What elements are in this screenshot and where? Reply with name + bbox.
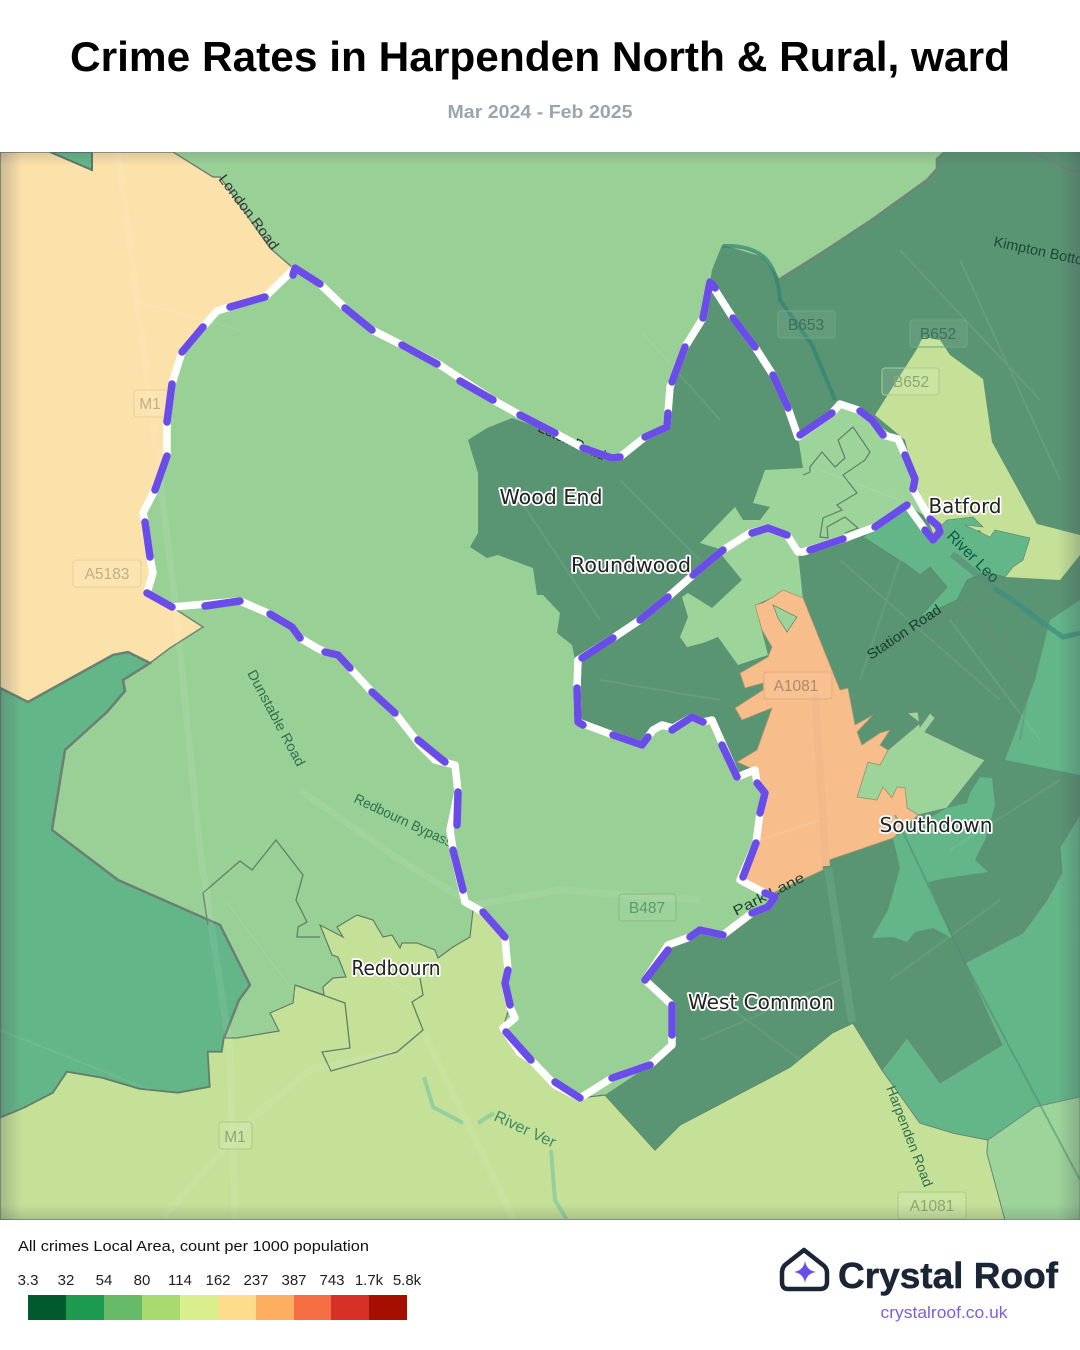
road shield: B652 lower: B652 <box>893 374 929 391</box>
road label: Park Lane: Park Lane <box>730 869 807 919</box>
legend tick labels: 5.8k <box>393 1272 422 1289</box>
road shield: B652 upper <box>910 320 967 347</box>
road shield: B652 upper: B652 <box>920 326 956 343</box>
road shield: M1 south <box>219 1122 252 1149</box>
region: west medium green <box>0 652 250 1118</box>
road strip through West Common <box>828 868 852 1022</box>
region: south yellow-green incl. Redbourn <box>0 910 1005 1220</box>
legend tick labels <box>18 1272 422 1289</box>
logo URL: crystalroof.co.uk <box>880 1304 1008 1322</box>
ward boundary: white line <box>143 268 940 1098</box>
region: east dark green <box>468 152 1080 1150</box>
region: Southdown medium green <box>872 777 995 942</box>
road label: River Ver: River Ver <box>491 1108 559 1152</box>
road shield: A1081 south <box>898 1192 966 1219</box>
road label: River Leo: River Leo <box>943 528 1002 587</box>
region: central light green north <box>700 404 930 552</box>
road shield: B652 lower <box>882 368 939 395</box>
river: upper river <box>723 246 835 400</box>
road shield: A1081 south: A1081 <box>910 1198 954 1215</box>
road shield: A1081 centre <box>764 672 832 699</box>
legend colour scale <box>28 1295 407 1320</box>
road shield: B653: B653 <box>788 317 824 334</box>
region: Batford yellow-green <box>875 337 1080 580</box>
region: Southdown light green <box>857 712 985 815</box>
place label: West Common: West Common <box>688 990 834 1014</box>
road shield: M1 north: M1 <box>139 396 161 413</box>
legend tick labels: 114 <box>168 1272 192 1289</box>
logo: Crystal Roof <box>782 1250 1059 1322</box>
logo wordmark: Crystal Roof <box>838 1255 1059 1296</box>
legend tick labels: 743 <box>319 1272 345 1289</box>
map road: dark diagonal line <box>895 815 1080 1180</box>
legend tick labels: 237 <box>243 1272 269 1289</box>
choropleth map <box>0 152 1080 1220</box>
legend tick labels: 80 <box>134 1272 150 1289</box>
legend tick labels: 387 <box>281 1272 307 1289</box>
place label: Southdown: Southdown <box>880 813 992 837</box>
region: small green corner <box>50 152 92 170</box>
river: River Leo dark strip <box>950 552 982 576</box>
region: Batford medium green <box>863 505 1030 617</box>
region: south-east medium green <box>882 815 1080 1140</box>
region: east medium green upper <box>1005 600 1080 775</box>
legend <box>18 1238 422 1320</box>
road shield: M1 south: M1 <box>224 1129 246 1146</box>
road shield: B487: B487 <box>629 900 665 917</box>
road shield: A5183 <box>73 560 141 587</box>
ward boundary <box>143 268 940 1098</box>
outline: Redbourn sub-areas <box>203 840 423 1071</box>
legend tick labels: 1.7k <box>355 1272 384 1289</box>
outline: Batford internal boundary <box>803 427 870 538</box>
legend tick labels: 32 <box>58 1272 74 1289</box>
road shield: B487 <box>619 894 676 921</box>
region: north-west cream area <box>0 152 293 702</box>
place label: Roundwood: Roundwood <box>571 553 691 577</box>
road label: Station Road: Station Road <box>864 601 944 662</box>
boundary: north-east grey edge <box>780 152 1080 279</box>
region: orange pocket light green <box>773 605 797 632</box>
road shield: A1081 centre: A1081 <box>774 678 818 695</box>
road shield: A5183: A5183 <box>85 566 129 583</box>
region: central light green south <box>680 528 803 665</box>
road strip through orange <box>822 860 830 866</box>
subtitle: date range: Mar 2024 - Feb 2025 <box>448 101 632 122</box>
river: lower River Leo <box>993 588 1080 637</box>
map base: light green areas <box>53 152 943 1096</box>
place label: Redbourn: Redbourn <box>352 956 440 980</box>
road shield: B653 <box>778 311 835 338</box>
road label: Dunstable Road: Dunstable Road <box>244 667 309 769</box>
legend tick labels: 3.3 <box>18 1272 38 1289</box>
place label: Wood End: Wood End <box>500 485 602 509</box>
legend tick labels: 162 <box>205 1272 231 1289</box>
title: Crime Rates in Harpenden North & Rural, ward <box>70 33 1010 80</box>
road label: London Road: London Road <box>216 171 283 253</box>
region: central orange high-crime area <box>735 590 918 893</box>
region: south-east corner light green <box>987 1097 1080 1220</box>
road label: Redbourn Bypass: Redbourn Bypass <box>352 790 455 850</box>
map roads: faint road network <box>118 152 514 1220</box>
map edge vignette <box>0 152 1080 1220</box>
road label: Harpenden Road: Harpenden Road <box>883 1083 936 1189</box>
road label: Luton Road: Luton Road <box>536 419 608 463</box>
icon: house with star <box>782 1250 827 1289</box>
river: River Ver <box>424 1077 567 1220</box>
road shield: M1 north <box>134 390 167 417</box>
map streets: faint minor streets <box>0 250 1060 1090</box>
legend tick labels: 54 <box>96 1272 112 1289</box>
legend title: All crimes Local Area, count per 1000 population <box>18 1238 369 1255</box>
place label: Batford: Batford <box>928 494 1002 518</box>
ward boundary: purple dashes <box>145 268 940 1098</box>
map road: dark grey minor roads <box>880 590 1047 975</box>
